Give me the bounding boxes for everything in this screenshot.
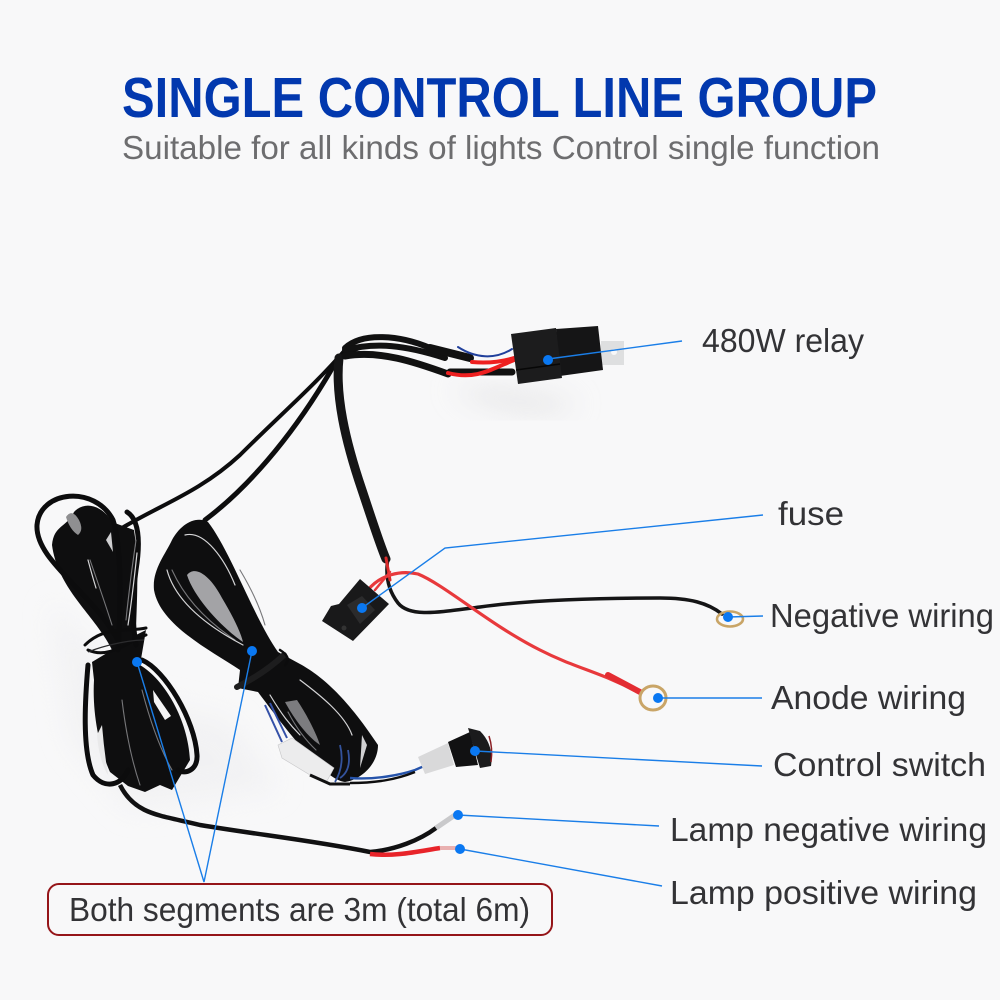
label: 480W relay: 480W relay xyxy=(702,322,864,359)
switch wires and control switch xyxy=(335,728,492,783)
white connector xyxy=(265,703,350,784)
leader lines xyxy=(137,341,763,886)
label: lamp positive wiring: Lamp positive wiring xyxy=(670,874,977,911)
label: negative wiring: Negative wiring xyxy=(770,597,994,634)
subtitle: Suitable for all kinds of lights Control single function xyxy=(122,129,880,166)
lamp wires xyxy=(120,785,460,855)
callout: segment length: Both segments are 3m (total 6m) xyxy=(69,891,530,928)
relay xyxy=(511,326,624,384)
fuse holder xyxy=(322,579,389,641)
wiring harness photo xyxy=(37,326,743,855)
label: control switch: Control switch xyxy=(773,746,986,783)
title: SINGLE CONTROL LINE GROUP xyxy=(122,66,877,130)
ring terminals xyxy=(640,612,743,710)
label: anode wiring: Anode wiring xyxy=(771,679,966,716)
main trunk wires xyxy=(122,337,722,692)
callout: segment length xyxy=(48,884,552,935)
callout dots xyxy=(132,355,733,854)
left coil xyxy=(37,496,197,792)
right coil xyxy=(154,520,378,782)
label: lamp negative wiring: Lamp negative wiring xyxy=(670,811,987,848)
label: fuse: fuse xyxy=(778,495,844,532)
